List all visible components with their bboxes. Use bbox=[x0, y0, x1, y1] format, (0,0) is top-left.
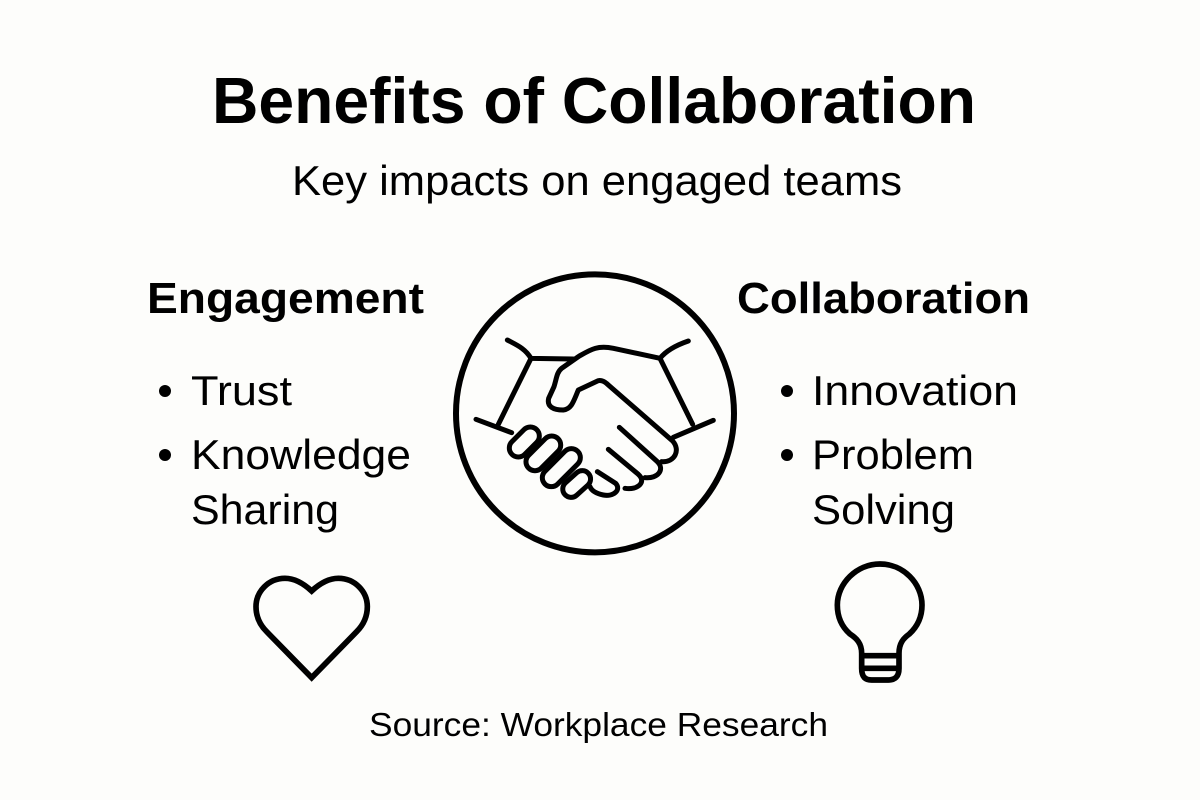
bullet list: engagement: Trust bbox=[191, 367, 292, 414]
bullet list: engagement: Sharing bbox=[191, 486, 339, 533]
icon: heart bbox=[256, 578, 367, 678]
icon: light bulb bbox=[837, 564, 922, 680]
bullet list: collaboration: Solving bbox=[812, 486, 955, 533]
bullet list: engagement bbox=[159, 367, 411, 533]
panel: collaboration bbox=[737, 274, 1030, 680]
title: Benefits of Collaboration bbox=[212, 64, 976, 137]
subtitle: Key impacts on engaged teams bbox=[292, 157, 902, 204]
heading: engagement: Engagement bbox=[147, 274, 424, 323]
bullet list: collaboration bbox=[781, 367, 1018, 533]
source note: Source: Workplace Research bbox=[369, 706, 828, 743]
panel: engagement bbox=[147, 274, 424, 678]
bullet list: engagement: Knowledge bbox=[191, 431, 411, 478]
bullet list: collaboration: Innovation bbox=[812, 367, 1018, 414]
heading: collaboration: Collaboration bbox=[737, 274, 1030, 323]
icon: handshake in circle bbox=[456, 274, 734, 552]
bullet list: collaboration: Problem bbox=[812, 431, 974, 478]
